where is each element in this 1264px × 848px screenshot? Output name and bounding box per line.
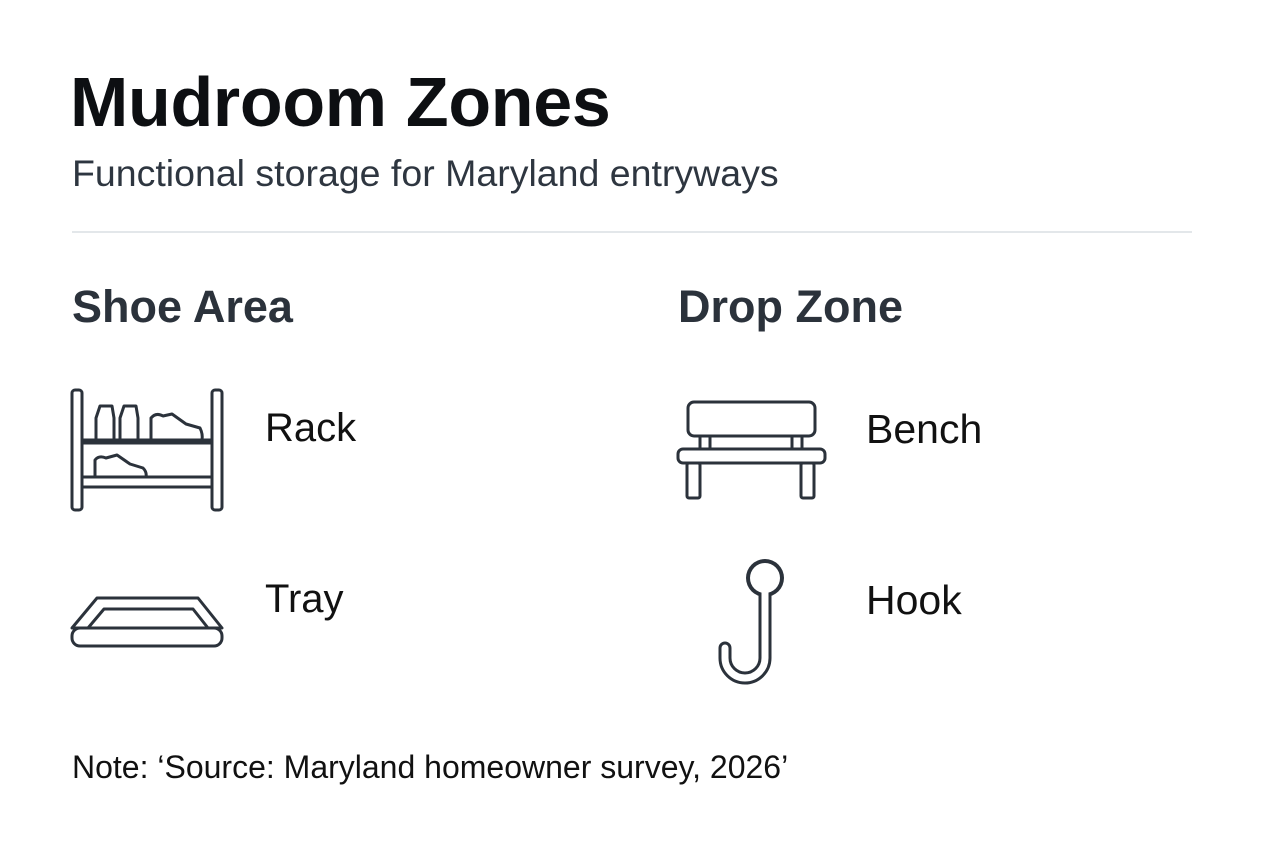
note: Note: ‘Source: Maryland homeowner survey, 2026’ [72, 749, 788, 785]
icon: bench [678, 402, 825, 498]
label: tray: Tray [265, 577, 344, 621]
icon: rack [72, 390, 222, 510]
icon: hook [725, 559, 784, 678]
subtitle: Functional storage for Maryland entryways [72, 152, 779, 194]
heading: shoe area: Shoe Area [72, 281, 293, 332]
label: hook: Hook [866, 577, 962, 623]
label: bench: Bench [866, 406, 982, 452]
title: Mudroom Zones [70, 63, 611, 141]
label: rack: Rack [265, 406, 356, 450]
heading: drop zone: Drop Zone [678, 281, 903, 332]
icon: tray [72, 598, 222, 646]
